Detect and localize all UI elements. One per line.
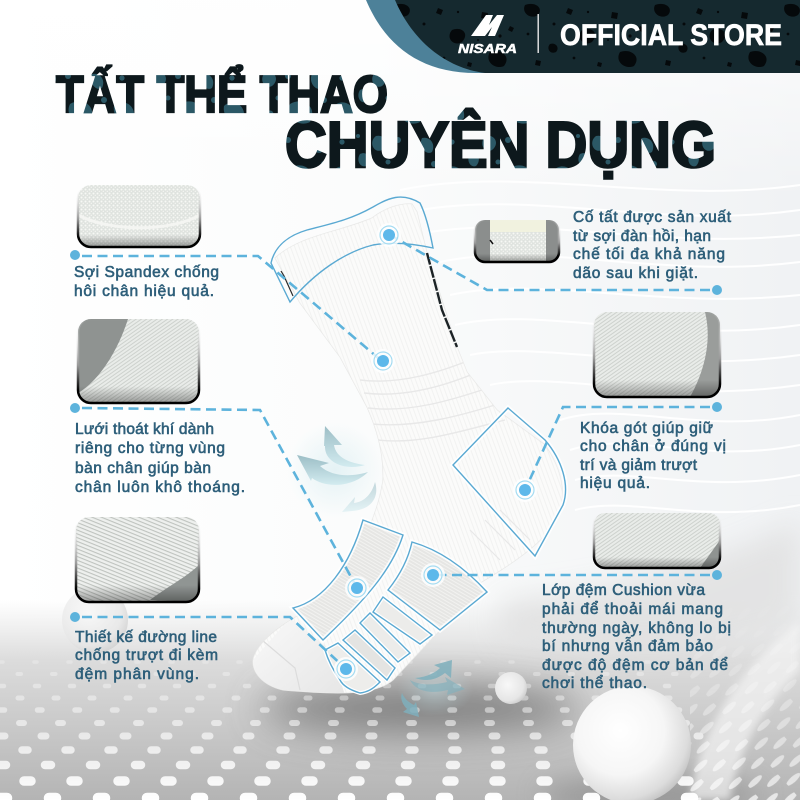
- thumbnail: cushion: [594, 513, 720, 568]
- text block: breathable mesh: riêng cho từng vùng: [75, 440, 225, 457]
- text block: anti-slip line: đệm phân vùng.: [75, 666, 199, 683]
- sock: [250, 200, 570, 700]
- icon: airflow arrows left: [287, 422, 383, 518]
- thumbnail: breathable mesh: [78, 319, 199, 403]
- text block: spandex: [74, 264, 219, 300]
- text block: cuff: [573, 209, 732, 282]
- thumbnail: cuff elastic: [475, 220, 559, 262]
- decorative spheres: [62, 587, 691, 800]
- title: [56, 65, 716, 181]
- divider: [538, 14, 539, 53]
- icon: airflow arrows bottom: [397, 660, 473, 717]
- header banner: [366, 0, 800, 73]
- panel: midfoot vent: [293, 520, 403, 640]
- text block: spandex: hôi chân hiệu quả.: [74, 283, 214, 300]
- text block: cuff: Cố tất được sản xuất: [573, 209, 732, 226]
- text block: cushion: phải để thoải mái mang: [542, 601, 723, 618]
- panel: cushion: [388, 542, 487, 630]
- thumbnail: spandex knit: [78, 185, 200, 247]
- callout end dots: [70, 250, 722, 622]
- text block: cuff: từ sợi đàn hồi, hạn: [573, 228, 711, 245]
- text block: cushion: chơi thể thao.: [542, 675, 647, 692]
- thumbnail: heel lock: [594, 312, 720, 397]
- text block: cushion: [542, 582, 731, 692]
- text block: anti-slip line: Thiết kế đường line: [75, 629, 217, 646]
- text block: heel lock: hiệu quả.: [580, 475, 650, 492]
- hotspot markers: [334, 223, 537, 681]
- panel: heel: [453, 408, 566, 556]
- sock logo stripe: [427, 253, 457, 347]
- text block: cushion: thường ngày, không lo bị: [542, 620, 731, 637]
- title line 1: TẤT THỂ THAO: [56, 65, 388, 124]
- text block: breathable mesh: bàn chân giúp bàn: [75, 460, 211, 477]
- text block: heel lock: cho chân ở đúng vị: [580, 438, 726, 455]
- floor with dot pattern: [0, 520, 800, 800]
- text block: heel lock: Khóa gót giúp giữ: [580, 420, 713, 437]
- text block: cushion: được độ đệm cơ bản để: [542, 657, 728, 674]
- text block: anti-slip line: [75, 629, 218, 683]
- thumbnail: anti-slip line: [76, 517, 199, 602]
- highlighted outline panels: [271, 197, 566, 693]
- text block: anti-slip line: chống trượt đi kèm: [75, 647, 218, 664]
- text block: cushion: Lớp đệm Cushion vừa: [542, 582, 705, 599]
- text block: heel lock: [580, 420, 726, 492]
- text block: cuff: chế tối đa khả năng: [573, 246, 725, 263]
- text block: cushion: bí nhưng vẫn đảm bảo: [542, 638, 713, 655]
- title line 2: CHUYÊN DỤNG: [285, 108, 716, 181]
- text block: cuff: dão sau khi giặt.: [573, 265, 698, 282]
- text block: spandex: Sợi Spandex chống: [74, 264, 219, 281]
- panel: sole strips: [325, 597, 432, 693]
- logo wordmark: NISARA: [458, 41, 517, 56]
- callout lines: [82, 235, 710, 669]
- text block: breathable mesh: chân luôn khô thoáng.: [75, 479, 245, 496]
- icon: Nisara logo mark: [471, 15, 504, 36]
- text block: breathable mesh: Lưới thoát khí dành: [75, 421, 214, 438]
- text block: breathable mesh: [75, 421, 245, 496]
- text block: heel lock: trí và giảm trượt: [580, 457, 698, 474]
- panel: cuff: [271, 197, 433, 302]
